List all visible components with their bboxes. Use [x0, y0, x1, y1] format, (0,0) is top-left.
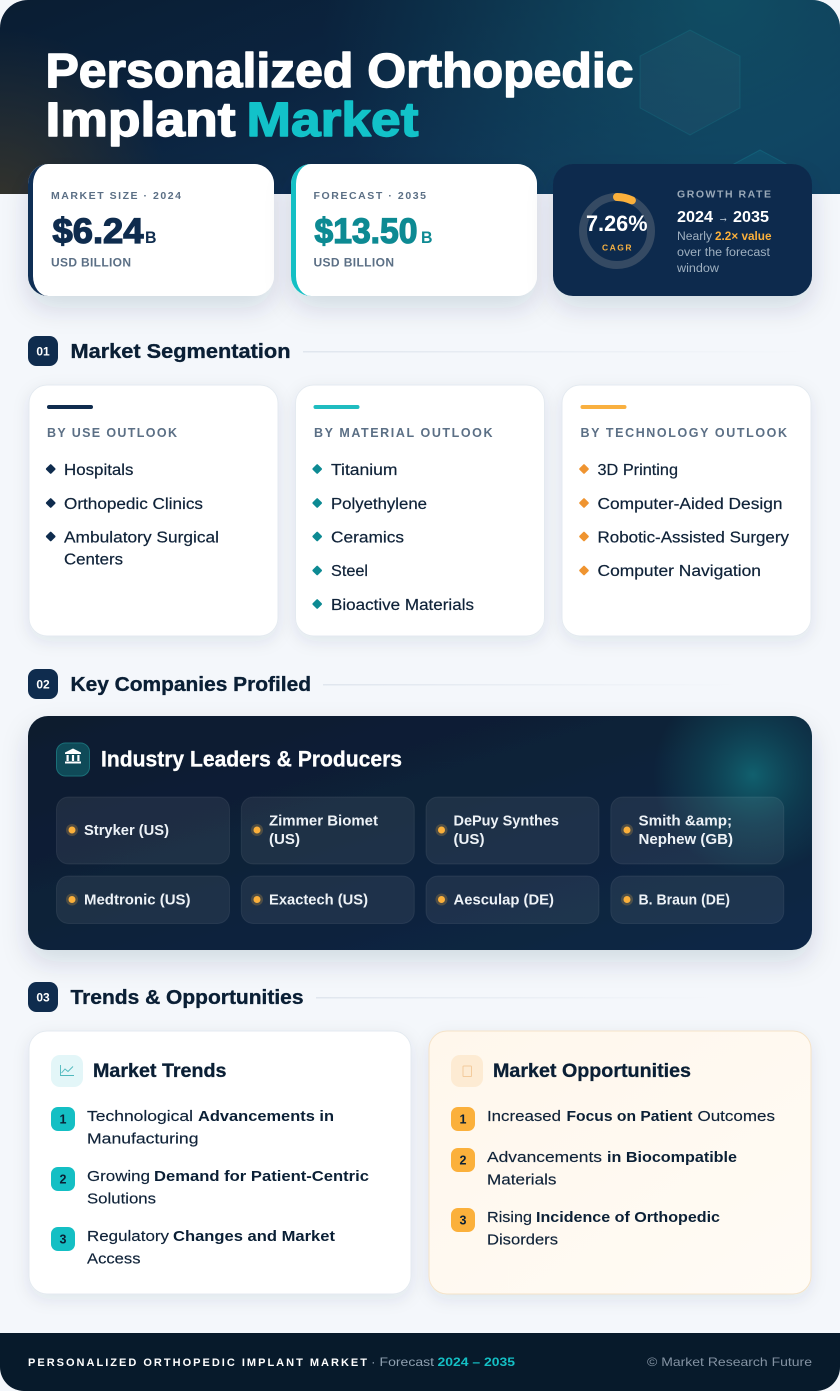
growth text: over the forecast: [677, 247, 771, 259]
list: Bioactive Materials: [331, 597, 474, 614]
growth text: [676, 188, 772, 275]
opportunity 1: Focus on Patient: [566, 1108, 693, 1125]
heading: Market Trends: [93, 1061, 226, 1082]
CAGR ring: [583, 197, 651, 265]
trend 1: Technological: [87, 1108, 193, 1125]
opportunity 3: Rising: [487, 1209, 532, 1226]
trend 2: [51, 1167, 369, 1208]
title: Implant: [46, 94, 236, 147]
opportunity 3: Disorders: [487, 1232, 558, 1248]
section heading 02: 02: [36, 678, 50, 692]
section heading 01: [28, 336, 812, 366]
heading: BY MATERIAL OUTLOOK: [314, 426, 492, 440]
value: $6.24: [52, 212, 144, 251]
unit: USD BILLION: [314, 256, 394, 270]
trend 3: 3: [60, 1232, 67, 1246]
trend 2: Solutions: [87, 1190, 156, 1208]
trend 2: Growing: [87, 1168, 150, 1185]
panel: market trends: [29, 1031, 411, 1294]
growth text: 2.2× value: [715, 231, 772, 243]
list: Computer Navigation: [598, 563, 761, 580]
company: Medtronic: [56, 876, 230, 924]
list: Orthopedic Clinics: [64, 496, 203, 513]
footer: © Market Research Future: [647, 1355, 812, 1369]
value: B: [421, 229, 433, 247]
footer: [0, 1333, 840, 1391]
section heading 03: [28, 982, 716, 1012]
list: Ceramics: [331, 530, 404, 546]
trend 3: [51, 1227, 335, 1268]
section heading 01: Market Segmentation: [70, 340, 290, 363]
section heading 03: 03: [36, 990, 50, 1004]
growth text: 2024: [677, 209, 713, 226]
list: [45, 462, 219, 568]
value: B: [145, 229, 157, 247]
stat card: market size 2024: [28, 164, 274, 296]
section heading 02: Key Companies Profiled: [70, 673, 311, 696]
panel: market opportunities: [429, 1031, 811, 1294]
opportunity 3: Incidence of Orthopedic: [536, 1209, 720, 1226]
label: FORECAST · 2035: [314, 190, 426, 202]
growth text: →: [718, 209, 728, 226]
CAGR ring: CAGR: [602, 242, 632, 252]
trend 3: Regulatory: [87, 1228, 170, 1245]
opportunity 1: Increased: [487, 1108, 561, 1125]
trend 1: Manufacturing: [87, 1130, 198, 1148]
company: Exactech: [241, 876, 414, 924]
company: Aesculap: [426, 876, 599, 924]
opportunity 2: 2: [460, 1154, 467, 1168]
list: Centers: [64, 552, 123, 568]
list: Robotic-Assisted Surgery: [598, 530, 789, 546]
list: Computer-Aided Design: [598, 496, 782, 513]
footer: · Forecast: [371, 1355, 435, 1369]
footer: 2024 – 2035: [438, 1355, 515, 1369]
trend 1: [51, 1107, 334, 1148]
opportunity 3: 3: [460, 1214, 467, 1228]
heading: BY USE OUTLOOK: [47, 426, 177, 440]
company: Aesculap: Aesculap (DE): [454, 892, 554, 908]
opportunity 1: 1: [460, 1112, 467, 1126]
opportunity 2: Materials: [487, 1172, 556, 1188]
list: Ambulatory Surgical: [64, 530, 219, 546]
company: Stryker: [56, 797, 230, 864]
trend 1: Advancements in: [198, 1108, 334, 1125]
list: 3D Printing: [598, 462, 678, 479]
list: Polyethylene: [331, 496, 427, 513]
opportunity 1: [451, 1107, 775, 1131]
opportunity 1: Outcomes: [698, 1108, 775, 1125]
title: Personalized Orthopedic: [46, 45, 634, 98]
icon: institution: [56, 743, 90, 776]
unit: USD BILLION: [51, 256, 131, 270]
panel: industry leaders: [28, 716, 812, 950]
company: Zimmer Biomet: [241, 797, 414, 864]
decorative hexagon large: [640, 30, 740, 135]
opportunity 2: in Biocompatible: [607, 1149, 737, 1166]
growth text: Nearly: [677, 231, 712, 243]
company: Exactech: Exactech (US): [269, 892, 368, 908]
company: DePuy Synthes: (US): [454, 832, 485, 848]
list: Titanium: [331, 462, 398, 479]
list: [312, 462, 474, 614]
heading: BY TECHNOLOGY OUTLOOK: [580, 426, 787, 440]
section heading 02: [28, 669, 743, 699]
trend 1: 1: [60, 1112, 67, 1126]
panel: by use outlook: [29, 385, 278, 636]
header banner: [0, 0, 840, 194]
opportunity 3: [451, 1208, 720, 1248]
trend 3: Access: [87, 1250, 140, 1268]
list: Hospitals: [64, 462, 134, 479]
label: MARKET SIZE · 2024: [51, 190, 181, 202]
footer: PERSONALIZED ORTHOPEDIC IMPLANT MARKET: [28, 1357, 367, 1369]
trend 2: Demand for Patient-Centric: [154, 1168, 369, 1185]
company: Zimmer Biomet: (US): [269, 832, 300, 848]
company: B. Braun: [611, 876, 784, 924]
company: DePuy Synthes: [426, 797, 599, 864]
value: $13.50: [314, 212, 418, 251]
growth text: 2035: [733, 209, 769, 226]
growth text: window: [676, 263, 720, 275]
company: Stryker: Stryker (US): [84, 823, 169, 839]
section heading 01: 01: [36, 344, 50, 358]
list: [579, 462, 789, 580]
heading: Market Opportunities: [493, 1061, 691, 1082]
CAGR ring: 7.26%: [586, 211, 648, 236]
icon: missing glyph box: [451, 1055, 483, 1087]
trend 3: Changes and Market: [173, 1228, 335, 1245]
opportunity 2: Advancements: [487, 1149, 602, 1166]
icon: line chart: [51, 1055, 83, 1087]
opportunity 2: [451, 1148, 737, 1188]
company: Smith & Nephew: Smith &amp;: [638, 814, 732, 830]
company: Smith & Nephew: Nephew (GB): [638, 832, 733, 848]
stat card: forecast 2035: [291, 164, 537, 296]
title: [46, 45, 634, 147]
growth text: GROWTH RATE: [677, 188, 771, 200]
company: Medtronic: Medtronic (US): [84, 892, 191, 908]
trend 2: 2: [60, 1172, 67, 1186]
company: DePuy Synthes: DePuy Synthes: [454, 814, 559, 830]
section heading 03: Trends & Opportunities: [70, 986, 304, 1009]
company: Zimmer Biomet: Zimmer Biomet: [269, 814, 378, 830]
stat card: growth rate: [553, 164, 812, 296]
panel: by technology outlook: [562, 385, 811, 636]
company: Smith & Nephew: [611, 797, 784, 864]
company: B. Braun: B. Braun (DE): [638, 892, 730, 908]
title: Market: [246, 94, 419, 147]
panel: by material outlook: [296, 385, 544, 636]
list: Steel: [331, 563, 368, 580]
heading: Industry Leaders & Producers: [101, 746, 402, 772]
